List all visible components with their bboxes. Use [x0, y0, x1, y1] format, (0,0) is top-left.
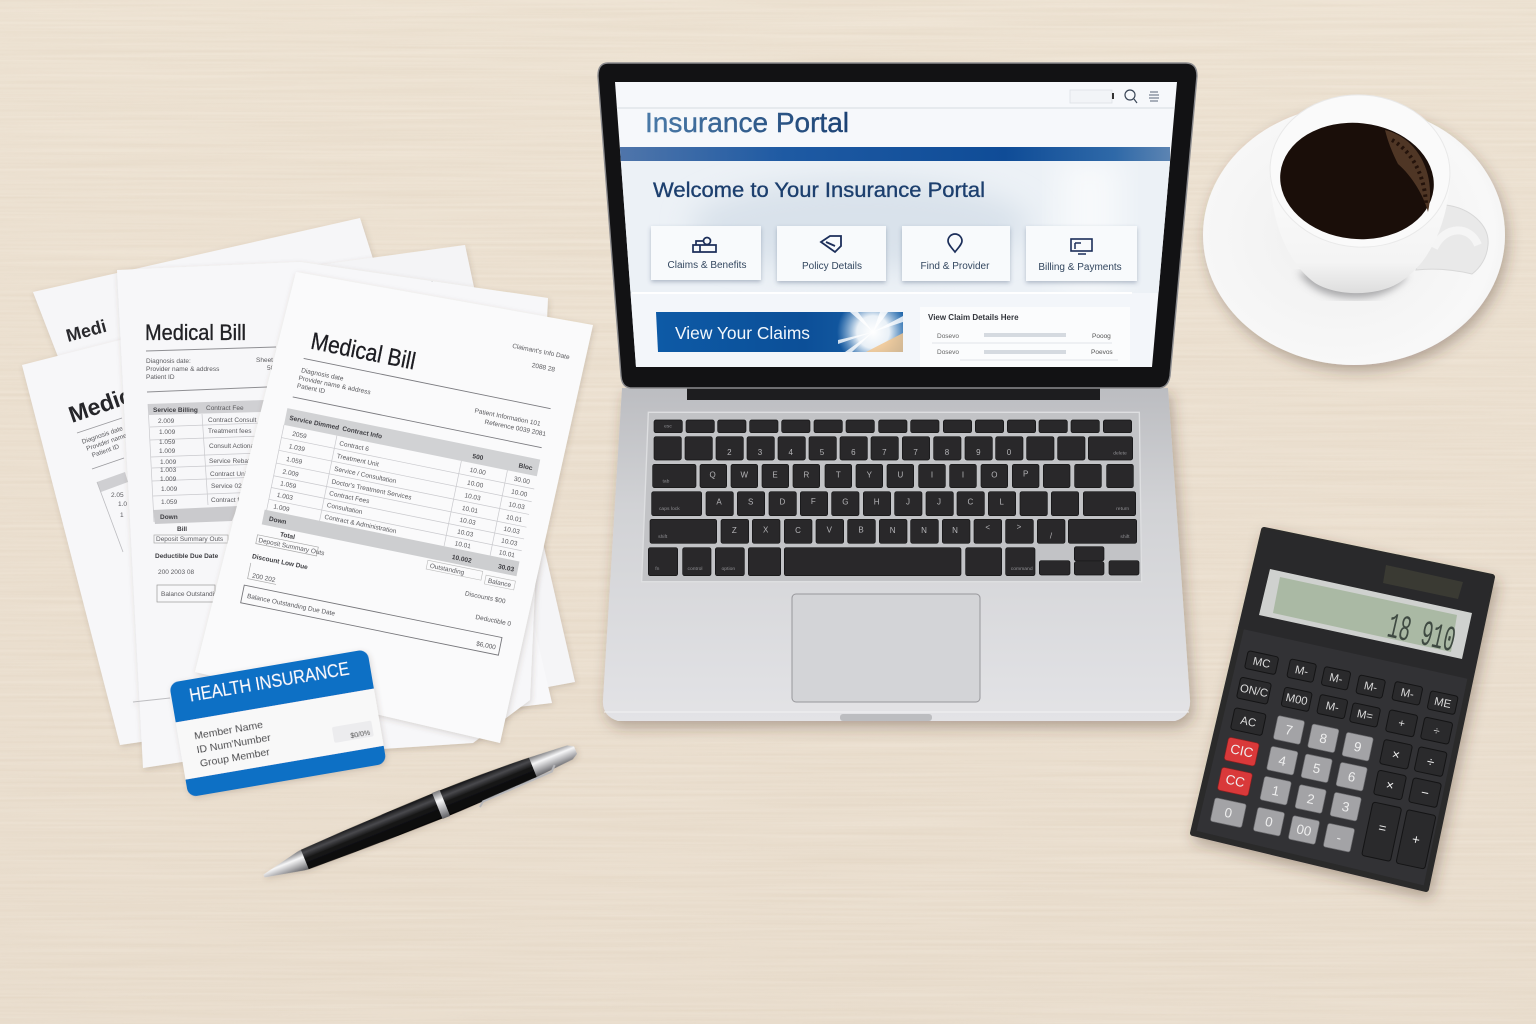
front sheet: polished Medical Bill: Claimant's Info Date [512, 343, 570, 361]
middle sheet with Medical Bill title: 1.059 [159, 439, 176, 446]
middle sheet with Medical Bill title: Contract Fee [206, 405, 244, 412]
keyboard: fn [655, 566, 660, 572]
keyboard: I [931, 471, 933, 480]
middle sheet with Medical Bill title: Contract Unit [210, 471, 248, 478]
crema [1385, 130, 1430, 212]
cup foot shadow [1298, 272, 1408, 298]
middle sheet with Medical Bill title: Contract Consult [208, 417, 257, 424]
bill table: Doctor's Treatment Services [331, 479, 413, 502]
card: policy details: Policy Details [802, 261, 862, 272]
health insurance card [169, 649, 387, 797]
laptop screen: insurance portal [610, 80, 1180, 370]
keyboard: 9 [976, 448, 981, 457]
keyboard: N [890, 526, 896, 535]
health insurance card: Group Member [199, 746, 271, 770]
calculator keys: 0 [1264, 814, 1274, 830]
calculator keys: = [1377, 820, 1388, 836]
front sheet: polished Medical Bill: Discounts $00 [464, 590, 506, 605]
keyboard: 7 [913, 448, 918, 457]
middle sheet with Medical Bill title: 2.009 [158, 418, 175, 425]
keyboard: N [952, 526, 958, 535]
keyboard: option [722, 566, 735, 572]
laptop [598, 63, 1197, 721]
back sheet with partial title: Medi [64, 316, 109, 346]
bill table: Down [268, 516, 287, 526]
card: billing and payments [1026, 226, 1137, 281]
calculator keys: × [1385, 777, 1395, 793]
card: find a provider: Find & Provider [921, 261, 990, 272]
claims summary panel: Dosevo [937, 333, 959, 340]
bill table: Contract Info [342, 426, 383, 441]
card: policy details [777, 226, 886, 281]
claims summary panel: Dosevo [937, 349, 959, 356]
claims summary panel: Poevos [1091, 349, 1113, 356]
calculator keys: M00 [1284, 692, 1309, 708]
front sheet: polished Medical Bill: Total [279, 531, 296, 541]
saucer [1203, 105, 1505, 365]
bill table: 10.01 [461, 505, 479, 515]
keyboard: W [741, 471, 749, 480]
keyboard: 0 [1007, 448, 1012, 457]
keyboard: N [921, 526, 927, 535]
left fanned sheet: Medic [65, 382, 135, 428]
solar panel [1383, 565, 1463, 599]
left fanned sheet [22, 335, 260, 745]
bill table: 10.03 [464, 492, 482, 502]
bill table: Consultation [326, 502, 363, 516]
keyboard: 7 [882, 448, 887, 457]
back sheet upper right [320, 245, 475, 305]
keyboard: X [763, 525, 769, 534]
calculator keys: AC [1239, 715, 1257, 730]
back sheet upper right: insurance [409, 280, 434, 289]
middle sheet with Medical Bill title: 1.009 [160, 476, 177, 483]
calculator keys: 4 [1277, 753, 1288, 769]
keyboard: caps lock [659, 506, 680, 512]
card: billing and payments: Billing & Payments [1038, 262, 1122, 273]
bill table: 500 [472, 453, 484, 462]
middle sheet with Medical Bill title: 1.003 [160, 467, 177, 474]
coffee cup and saucer [1203, 89, 1505, 365]
front sheet: polished Medical Bill: Diagnosis date [300, 367, 344, 383]
front sheet: polished Medical Bill: Discount Low Due [251, 553, 309, 571]
trackpad [792, 594, 980, 702]
keyboard: 2 [727, 448, 732, 457]
front sheet: polished Medical Bill: Reference 0039 2081 [484, 419, 547, 438]
cup handle [1416, 205, 1488, 274]
bill table: Bloc [518, 462, 533, 472]
health insurance card: $0/0% [350, 730, 371, 740]
bill table: 10.00 [510, 489, 528, 499]
lcd digits: 18 910 [1384, 607, 1459, 662]
front sheet: polished Medical Bill: Deductible 0 [475, 614, 512, 628]
front sheet: polished Medical Bill: Patient ID [296, 383, 326, 395]
hinge [687, 384, 1100, 400]
calculator keys: ÷ [1432, 725, 1441, 738]
middle sheet with Medical Bill title: 1.009 [161, 486, 178, 493]
keyboard: shift [1120, 534, 1130, 540]
bill table: Contract & Administration [324, 514, 397, 535]
health insurance card: Member Name [193, 719, 264, 742]
middle sheet with Medical Bill title: Service 02 [211, 483, 242, 490]
keyboard: J [906, 497, 910, 506]
left fanned sheet: Provider name [86, 432, 128, 453]
calculator keys: 5 [1311, 760, 1322, 777]
bill table: 10.00 [466, 480, 484, 490]
paper stack: medical bills [22, 218, 593, 768]
health insurance card: HEALTH INSURANCE [188, 659, 351, 706]
laptop base [603, 388, 1190, 721]
keyboard: G [842, 497, 848, 506]
bill table: 10.03 [501, 538, 518, 548]
bill table: 1.059 [279, 480, 297, 490]
keyboard: shift [658, 534, 668, 540]
coffee [1274, 115, 1440, 247]
bill table: 10.01 [498, 549, 516, 559]
middle sheet with Medical Bill title: Balance Outstanding [161, 591, 222, 598]
calculator keys [1210, 651, 1458, 869]
keyboard: D [779, 498, 785, 507]
display frame [1259, 569, 1472, 659]
bill table: 1.039 [288, 443, 306, 453]
card: claims and benefits [651, 226, 761, 280]
keyboard: 5 [820, 448, 825, 457]
middle sheet with Medical Bill title: Deposit Summary Outs [156, 536, 224, 543]
bill table: Contract Fees [328, 490, 371, 505]
middle sheet with Medical Bill title: Provider name & address [146, 366, 220, 373]
front sheet: polished Medical Bill: Balance [487, 578, 512, 589]
calculator [1193, 529, 1493, 889]
keyboard: Z [732, 526, 737, 535]
bill table: 10.002 [451, 554, 472, 565]
middle sheet with Medical Bill title: 1.009 [159, 448, 176, 455]
calculator keys: M- [1324, 700, 1340, 715]
calculator keys: ÷ [1425, 754, 1436, 770]
keyboard: 6 [851, 448, 856, 457]
keyboard: > [1017, 522, 1022, 531]
keyboard: C [795, 526, 801, 535]
calculator keys: 3 [1340, 799, 1351, 815]
bill table: Contract 6 [339, 440, 370, 453]
keyboard: F [811, 497, 816, 506]
keyboard: < [985, 523, 990, 532]
calculator keys: 1 [1270, 783, 1281, 799]
bill table: 10.03 [456, 529, 474, 539]
bill table: 10.01 [454, 540, 472, 550]
calculator keys: + [1397, 717, 1406, 731]
bill table [262, 408, 540, 576]
keyboard: R [803, 471, 809, 480]
laptop lid [598, 63, 1197, 388]
calculator keys: ON/C [1239, 683, 1269, 700]
blue band [620, 147, 1170, 161]
front sheet: polished Medical Bill [195, 272, 593, 743]
front sheet: polished Medical Bill: Outstanding [429, 563, 465, 577]
keyboard: command [1011, 566, 1033, 572]
bill table: 10.00 [469, 467, 487, 477]
keyboard: L [999, 497, 1004, 506]
left fanned sheet: 1 [120, 512, 124, 519]
bill table: Service / Consultation [333, 466, 397, 485]
left fanned sheet: 2.05 [111, 492, 124, 499]
calculator keys: M- [1363, 680, 1378, 695]
keyboard: U [897, 471, 903, 480]
portal title: Insurance Portal [645, 107, 849, 138]
bill table: 30.00 [513, 476, 531, 486]
left fanned sheet: Patient ID [91, 443, 121, 459]
bill table: 30.03 [497, 563, 515, 574]
middle sheet with Medical Bill title: Contract fee [211, 497, 247, 504]
keyboard: delete [1113, 450, 1127, 456]
keyboard: I [962, 471, 964, 480]
keyboard: B [858, 525, 864, 534]
middle sheet with Medical Bill title: Service Rebate [209, 458, 254, 465]
view your claims button [656, 312, 903, 352]
keyboard: C [967, 497, 973, 506]
calculator body [1193, 530, 1492, 889]
card: claims and benefits: Claims & Benefits [668, 260, 746, 271]
bill table: 10.03 [503, 526, 521, 536]
right lower corner sheets [495, 530, 575, 708]
keyboard: T [836, 471, 841, 480]
calculator keys: − [1420, 785, 1431, 801]
keyboard: V [827, 525, 833, 534]
claims summary panel: Pooog [1092, 333, 1111, 340]
keyboard: S [748, 497, 753, 506]
keyboard: O [991, 471, 997, 480]
calculator keys: 2 [1305, 791, 1316, 807]
keyboard: E [772, 471, 778, 480]
keyboard [642, 412, 1142, 582]
left fanned sheet: Diagnosis date [81, 425, 124, 446]
middle sheet with Medical Bill title: Medical Bill [145, 320, 246, 345]
bill table: 1.003 [276, 492, 294, 502]
keyboard: 4 [788, 448, 793, 457]
middle sheet with Medical Bill title: 1.009 [160, 459, 177, 466]
bill table: 10.03 [459, 517, 477, 527]
bill table: 1.009 [273, 503, 290, 514]
keyboard: control [688, 566, 702, 572]
calculator keys: 00 [1295, 821, 1313, 839]
middle sheet with Medical Bill title: Down [160, 514, 178, 521]
front sheet: polished Medical Bill: $6,000 [475, 641, 497, 651]
middle sheet with Medical Bill title: Deductible Due Date [155, 553, 219, 560]
bill table: 2059 [292, 431, 308, 441]
middle sheet with Medical Bill title: Sheet [256, 357, 273, 364]
back sheet with partial title [33, 218, 374, 362]
card: find a provider [902, 226, 1010, 281]
view your claims button: View Your Claims [675, 323, 810, 343]
calculator keys: M- [1399, 687, 1415, 701]
bill table: 10.01 [505, 514, 523, 524]
keyboard: Q [710, 471, 716, 480]
calculator keys: ME [1433, 696, 1453, 711]
calculator keys: + [1411, 831, 1422, 848]
keyboard: A [716, 498, 722, 507]
calculator keys: M= [1356, 708, 1374, 723]
middle sheet with Medical Bill title: 200 2003 08 [158, 569, 195, 576]
keyboard: Y [867, 471, 873, 480]
bill table: Service Dimmed [289, 415, 340, 432]
claims summary panel [928, 314, 1118, 360]
front sheet: polished Medical Bill: Provider name & address [298, 375, 372, 396]
front sheet: polished Medical Bill: 2088 28 [531, 362, 556, 374]
calculator keys: 6 [1346, 769, 1357, 785]
middle sheet with Medical Bill title: Service Billing [153, 407, 198, 414]
middle sheet with Medical Bill title: Diagnosis date: [146, 358, 191, 365]
keyboard: 8 [945, 448, 950, 457]
welcome heading: Welcome to Your Insurance Portal [653, 179, 985, 202]
bill table: 2.009 [282, 469, 300, 479]
middle sheet with Medical Bill title: Consult Actionable [209, 443, 263, 450]
calculator keys: MC [1252, 656, 1271, 671]
search bar and icons [1070, 90, 1159, 103]
cup body [1270, 170, 1450, 293]
health insurance card: ID Num'Number [196, 732, 272, 756]
calculator keys: CIC [1229, 741, 1255, 761]
pen [259, 737, 582, 892]
calculator keys: M- [1328, 672, 1344, 686]
keyboard: return [1116, 506, 1129, 512]
calculator keys: 8 [1318, 730, 1328, 747]
calculator keys: - [1335, 830, 1343, 846]
left fanned sheet: 1.0 [118, 501, 127, 508]
middle sheet with Medical Bill title: 1.059 [161, 499, 178, 506]
calculator keys: 9 [1352, 739, 1363, 755]
middle sheet with Medical Bill title: Treatment fees [208, 428, 252, 435]
keyboard: tab [663, 478, 670, 484]
front sheet: polished Medical Bill: Medical Bill [309, 328, 418, 375]
bill table: 1.059 [285, 456, 303, 466]
keyboard: esc [664, 424, 672, 430]
calculator keys: 0 [1223, 805, 1233, 821]
calculator keys: 7 [1284, 722, 1294, 738]
keyboard: P [1023, 469, 1028, 478]
keyboard: H [874, 497, 880, 506]
middle sheet with Medical Bill title: 58 [267, 365, 275, 372]
calculator keys: × [1391, 746, 1401, 763]
bill table: 10.03 [508, 501, 526, 511]
cup rim [1265, 89, 1455, 253]
middle sheet with Medical Bill title: 1.009 [159, 429, 176, 436]
middle sheet with Medical Bill title: Patient ID [146, 374, 175, 381]
front sheet: polished Medical Bill: Balance Outstanding Due Date [246, 593, 336, 618]
keyboard: 3 [758, 448, 763, 457]
calculator keys: M- [1294, 664, 1309, 679]
lcd [1273, 577, 1457, 652]
keyboard: J [937, 497, 941, 506]
middle sheet with Medical Bill title [117, 262, 548, 768]
front sheet: polished Medical Bill: 200 202 [252, 573, 276, 584]
keyboard: / [1050, 531, 1053, 540]
front sheet: polished Medical Bill: Deposit Summary Outs [258, 537, 326, 558]
middle sheet with Medical Bill title: Bill [177, 526, 187, 533]
claims summary panel: View Claim Details Here [928, 313, 1019, 322]
calculator keys: CC [1224, 772, 1247, 790]
front sheet: polished Medical Bill: Patient Information 101 [474, 408, 542, 428]
bill table: Treatment Unit [336, 453, 380, 468]
